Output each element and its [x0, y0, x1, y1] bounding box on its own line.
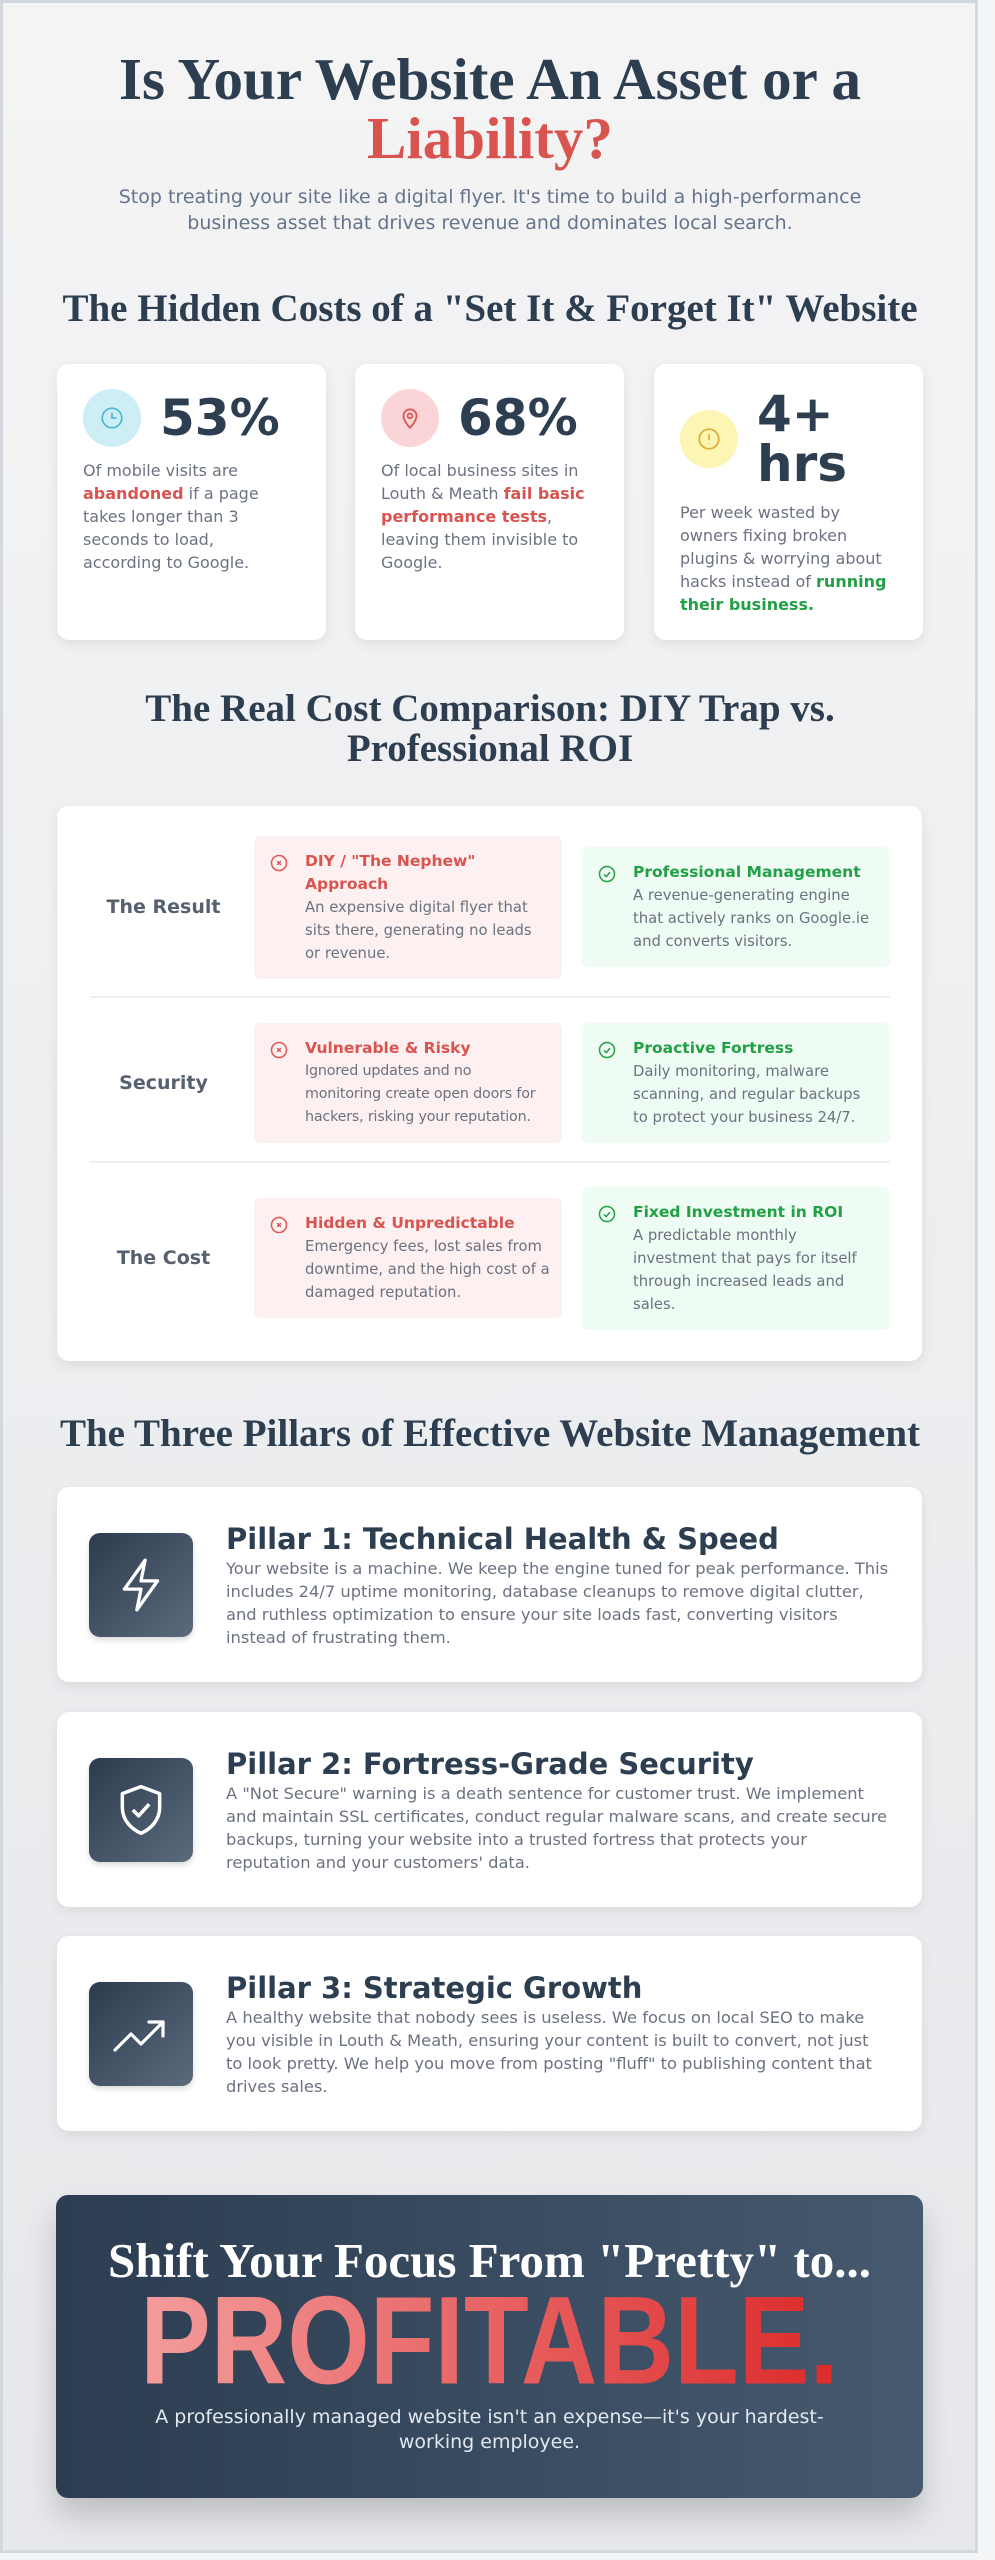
title: Liability? [367, 105, 613, 171]
pillar 2: A "Not Secure" warning is a death sentence for customer trust. We implement and maintain SSL certificates, conduct regular malware scans, and create secure backups, turning your website into a trusted fortress that protects your reputation and your customers' data. [226, 1784, 887, 1872]
stat card: 4+ hrs: 4+ hrs [757, 385, 847, 493]
icon: alert [680, 410, 738, 468]
diy box: Ignored updates and no [305, 1063, 471, 1079]
pillar 1: Pillar 1: Technical Health & Speed [226, 1522, 779, 1556]
stat card: 68% [355, 364, 624, 640]
stat card: 68%: Of local business sites in Louth & Meath fail basic performance tests, leaving them invisible to Google. [381, 461, 585, 572]
pro box: Professional Management [633, 863, 861, 881]
subtitle: Stop treating your site like a digital flyer. It's time to build a high-performance business asset that drives revenue and dominates local search. [119, 186, 861, 234]
row: security [119, 1023, 890, 1143]
icon: location pin [381, 389, 439, 447]
row: the cost [116, 1187, 890, 1330]
heading: pillars: The Three Pillars of Effective Website Management [60, 1412, 920, 1455]
diy box: Vulnerable & Risky [305, 1039, 471, 1057]
stat card: 53%: 53% [160, 389, 280, 447]
pro box: Proactive Fortress [633, 1039, 793, 1057]
diy box [254, 836, 562, 978]
pro box [582, 847, 890, 967]
diy box: monitoring create open doors for [305, 1086, 535, 1102]
pillar 1 [57, 1487, 922, 1682]
diy box [254, 1198, 562, 1318]
icon: trend up [89, 1982, 193, 2086]
diy box [254, 1023, 562, 1143]
stat card: 53%: Of mobile visits are abandoned if a page takes longer than 3 seconds to load, according to Google. [83, 461, 259, 572]
panel: call to action [56, 2195, 923, 2498]
row: the cost: The Cost [117, 1247, 210, 1269]
pro box: Daily monitoring, malware scanning, and regular backups to protect your business 24/7. [633, 1063, 860, 1126]
row: the result: The Result [107, 896, 220, 918]
pro box: A revenue-generating engine that actively ranks on Google.ie and converts visitors. [633, 887, 869, 950]
diy box: hackers, risking your reputation. [305, 1109, 531, 1125]
stat card: 68%: 68% [458, 389, 578, 447]
stat card: 4+ hrs: Per week wasted by owners fixing broken plugins & worrying about hacks instead of running their business. [680, 503, 886, 614]
panel: comparison table [57, 806, 922, 1361]
pillar 2 [57, 1712, 922, 1907]
cta heading: Shift Your Focus From "Pretty" to... [108, 2233, 871, 2288]
diy box: Hidden & Unpredictable [305, 1214, 515, 1232]
heading: comparison [145, 687, 835, 770]
heading: hidden costs: The Hidden Costs of a "Set It & Forget It" Website [62, 287, 918, 330]
pillar 3 [57, 1936, 922, 2131]
pillar 3: Pillar 3: Strategic Growth [226, 1970, 642, 2004]
icon: clock [83, 389, 141, 447]
profitable: PROFITABLE. [140, 2271, 839, 2411]
diy box: Emergency fees, lost sales from downtime, and the high cost of a damaged reputation. [305, 1238, 550, 1301]
diy box: DIY / "The Nephew" Approach [305, 852, 475, 892]
stat card: 53% [57, 364, 326, 640]
cta subtext: A professionally managed website isn't an expense—it's your hardest-working employee. [155, 2406, 824, 2453]
row: the result [106, 836, 890, 979]
title [119, 46, 861, 171]
diy box: An expensive digital flyer that sits there, generating no leads or revenue. [305, 898, 532, 962]
icon: shield [89, 1758, 193, 1862]
pillar 1: Your website is a machine. We keep the engine tuned for peak performance. This includes 24/7 uptime monitoring, database cleanups to remove digital clutter, and ruthless optimization to ensure your site loads fast, converting visitors instead of frustrating them. [226, 1558, 888, 1646]
title: Is Your Website An Asset or a [119, 46, 861, 112]
icon: lightning [89, 1532, 193, 1636]
pillar 2: Pillar 2: Fortress-Grade Security [226, 1746, 754, 1780]
pro box: Fixed Investment in ROI [633, 1202, 843, 1220]
pro box [582, 1186, 890, 1330]
stat card: 4+ hrs [654, 364, 923, 640]
pillar 3: A healthy website that nobody sees is useless. We focus on local SEO to make you visible in Louth & Meath, ensuring your content is built to convert, not just to look pretty. We help you move from posting "fluff" to publishing content that drives sales. [226, 2008, 872, 2096]
pro box: A predictable monthly investment that pays for itself through increased leads and sales. [633, 1226, 857, 1312]
pro box [582, 1023, 890, 1143]
row: security: Security [119, 1072, 208, 1094]
heading: comparison: Professional ROI [347, 727, 633, 770]
heading: comparison: The Real Cost Comparison: DIY Trap vs. [145, 687, 835, 730]
